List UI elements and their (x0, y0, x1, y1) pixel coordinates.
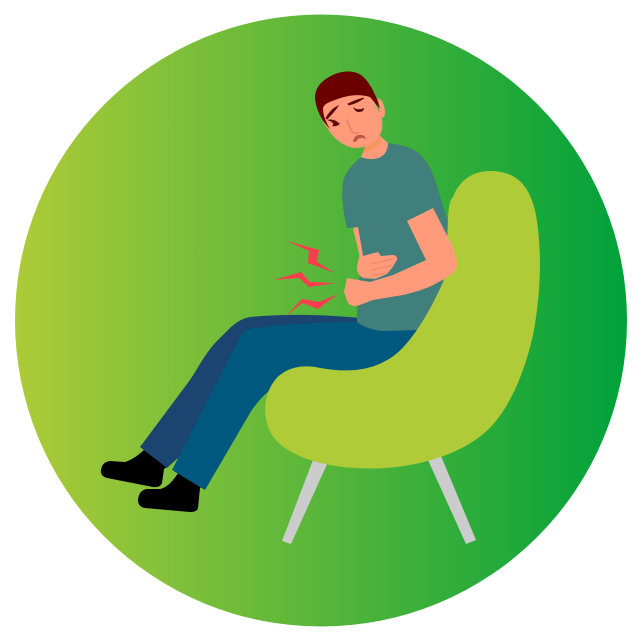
chair legs (282, 456, 476, 544)
front shoe (138, 470, 204, 512)
right brow (348, 98, 364, 105)
head (315, 71, 385, 148)
neck (361, 136, 388, 159)
pain bolts (274, 241, 338, 317)
mouth (353, 135, 366, 142)
shirt (342, 143, 448, 331)
ear (378, 98, 385, 117)
armchair (265, 171, 540, 469)
left brow (326, 106, 338, 119)
hair (315, 71, 380, 129)
neck shadow (363, 137, 382, 153)
back shoe (101, 448, 170, 487)
face (322, 91, 382, 148)
right eye (353, 107, 364, 112)
finger lines (371, 259, 392, 275)
arm with fist (344, 208, 457, 306)
nose (347, 120, 358, 133)
back arm (353, 227, 363, 258)
front leg (172, 322, 425, 490)
hand on stomach (357, 252, 397, 279)
back leg (140, 315, 360, 468)
left eye (327, 120, 340, 126)
